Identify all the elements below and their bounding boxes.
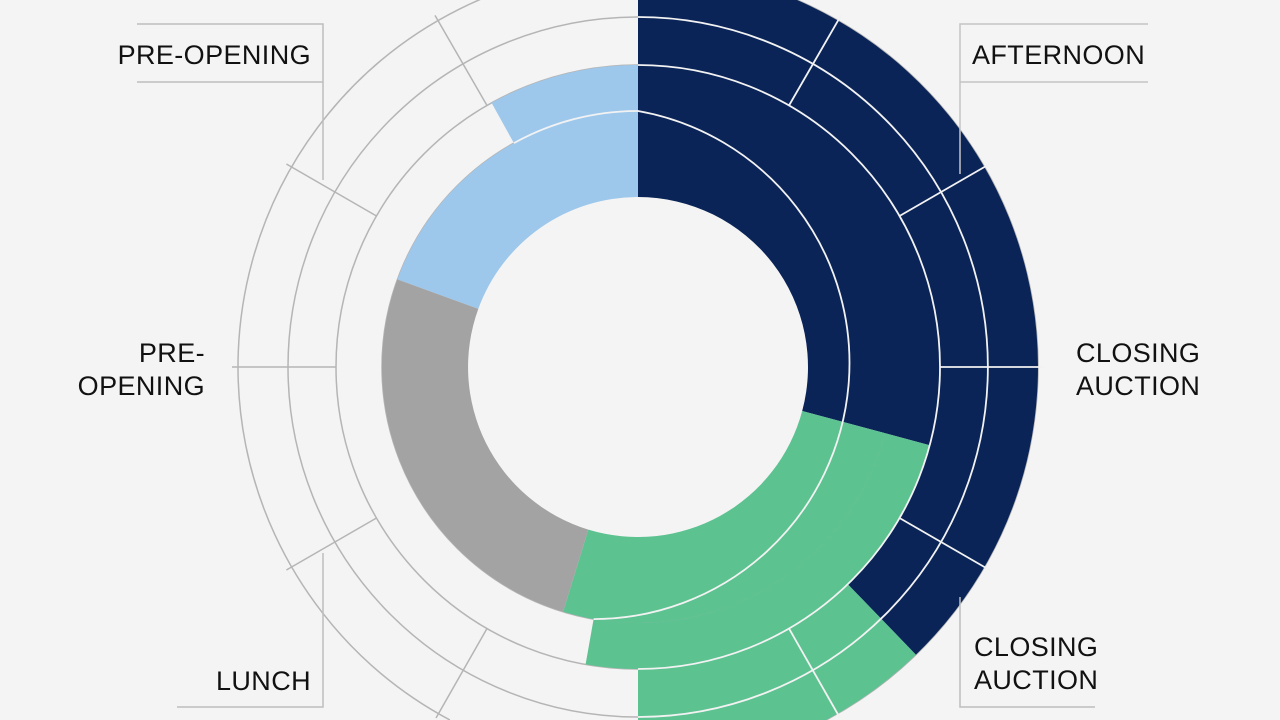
segment: gray bbox=[382, 279, 588, 612]
segment: green ring 2 bbox=[586, 433, 930, 669]
label: right closing auction: AUCTION bbox=[1076, 371, 1200, 401]
segment: navy outer bbox=[638, 0, 1038, 655]
label bracket: top-right afternoon: AFTERNOON bbox=[972, 40, 1145, 70]
label: right closing auction bbox=[1076, 338, 1200, 401]
label bracket: top-left pre-opening bbox=[118, 24, 323, 180]
label: left pre-opening bbox=[78, 338, 205, 401]
label: left pre-opening: PRE- bbox=[139, 338, 205, 368]
label bracket: top-left pre-opening: PRE-OPENING bbox=[118, 40, 311, 70]
segment: light blue outer step bbox=[492, 65, 638, 143]
label: right closing auction: CLOSING bbox=[1076, 338, 1200, 368]
gray radial dividers bbox=[232, 15, 487, 718]
label bracket: bottom-right closing auction: AUCTION bbox=[974, 665, 1098, 695]
label bracket: bottom-left lunch bbox=[177, 553, 323, 707]
label bracket: top-right afternoon bbox=[960, 24, 1148, 174]
segment: light blue inner bbox=[397, 111, 638, 309]
label bracket: bottom-right closing auction: CLOSING bbox=[974, 632, 1098, 662]
label bracket: bottom-right closing auction bbox=[960, 597, 1098, 707]
label bracket: bottom-left lunch: LUNCH bbox=[216, 666, 311, 696]
segment: green ring 1 bbox=[563, 411, 885, 623]
segment: green outer bbox=[638, 584, 916, 720]
chart: concentric session rings bbox=[232, 0, 1044, 720]
segment: navy inner bbox=[638, 65, 940, 445]
grid circles bbox=[238, 0, 1038, 720]
white arcs over colored areas bbox=[514, 15, 1044, 718]
label: left pre-opening: OPENING bbox=[78, 371, 205, 401]
